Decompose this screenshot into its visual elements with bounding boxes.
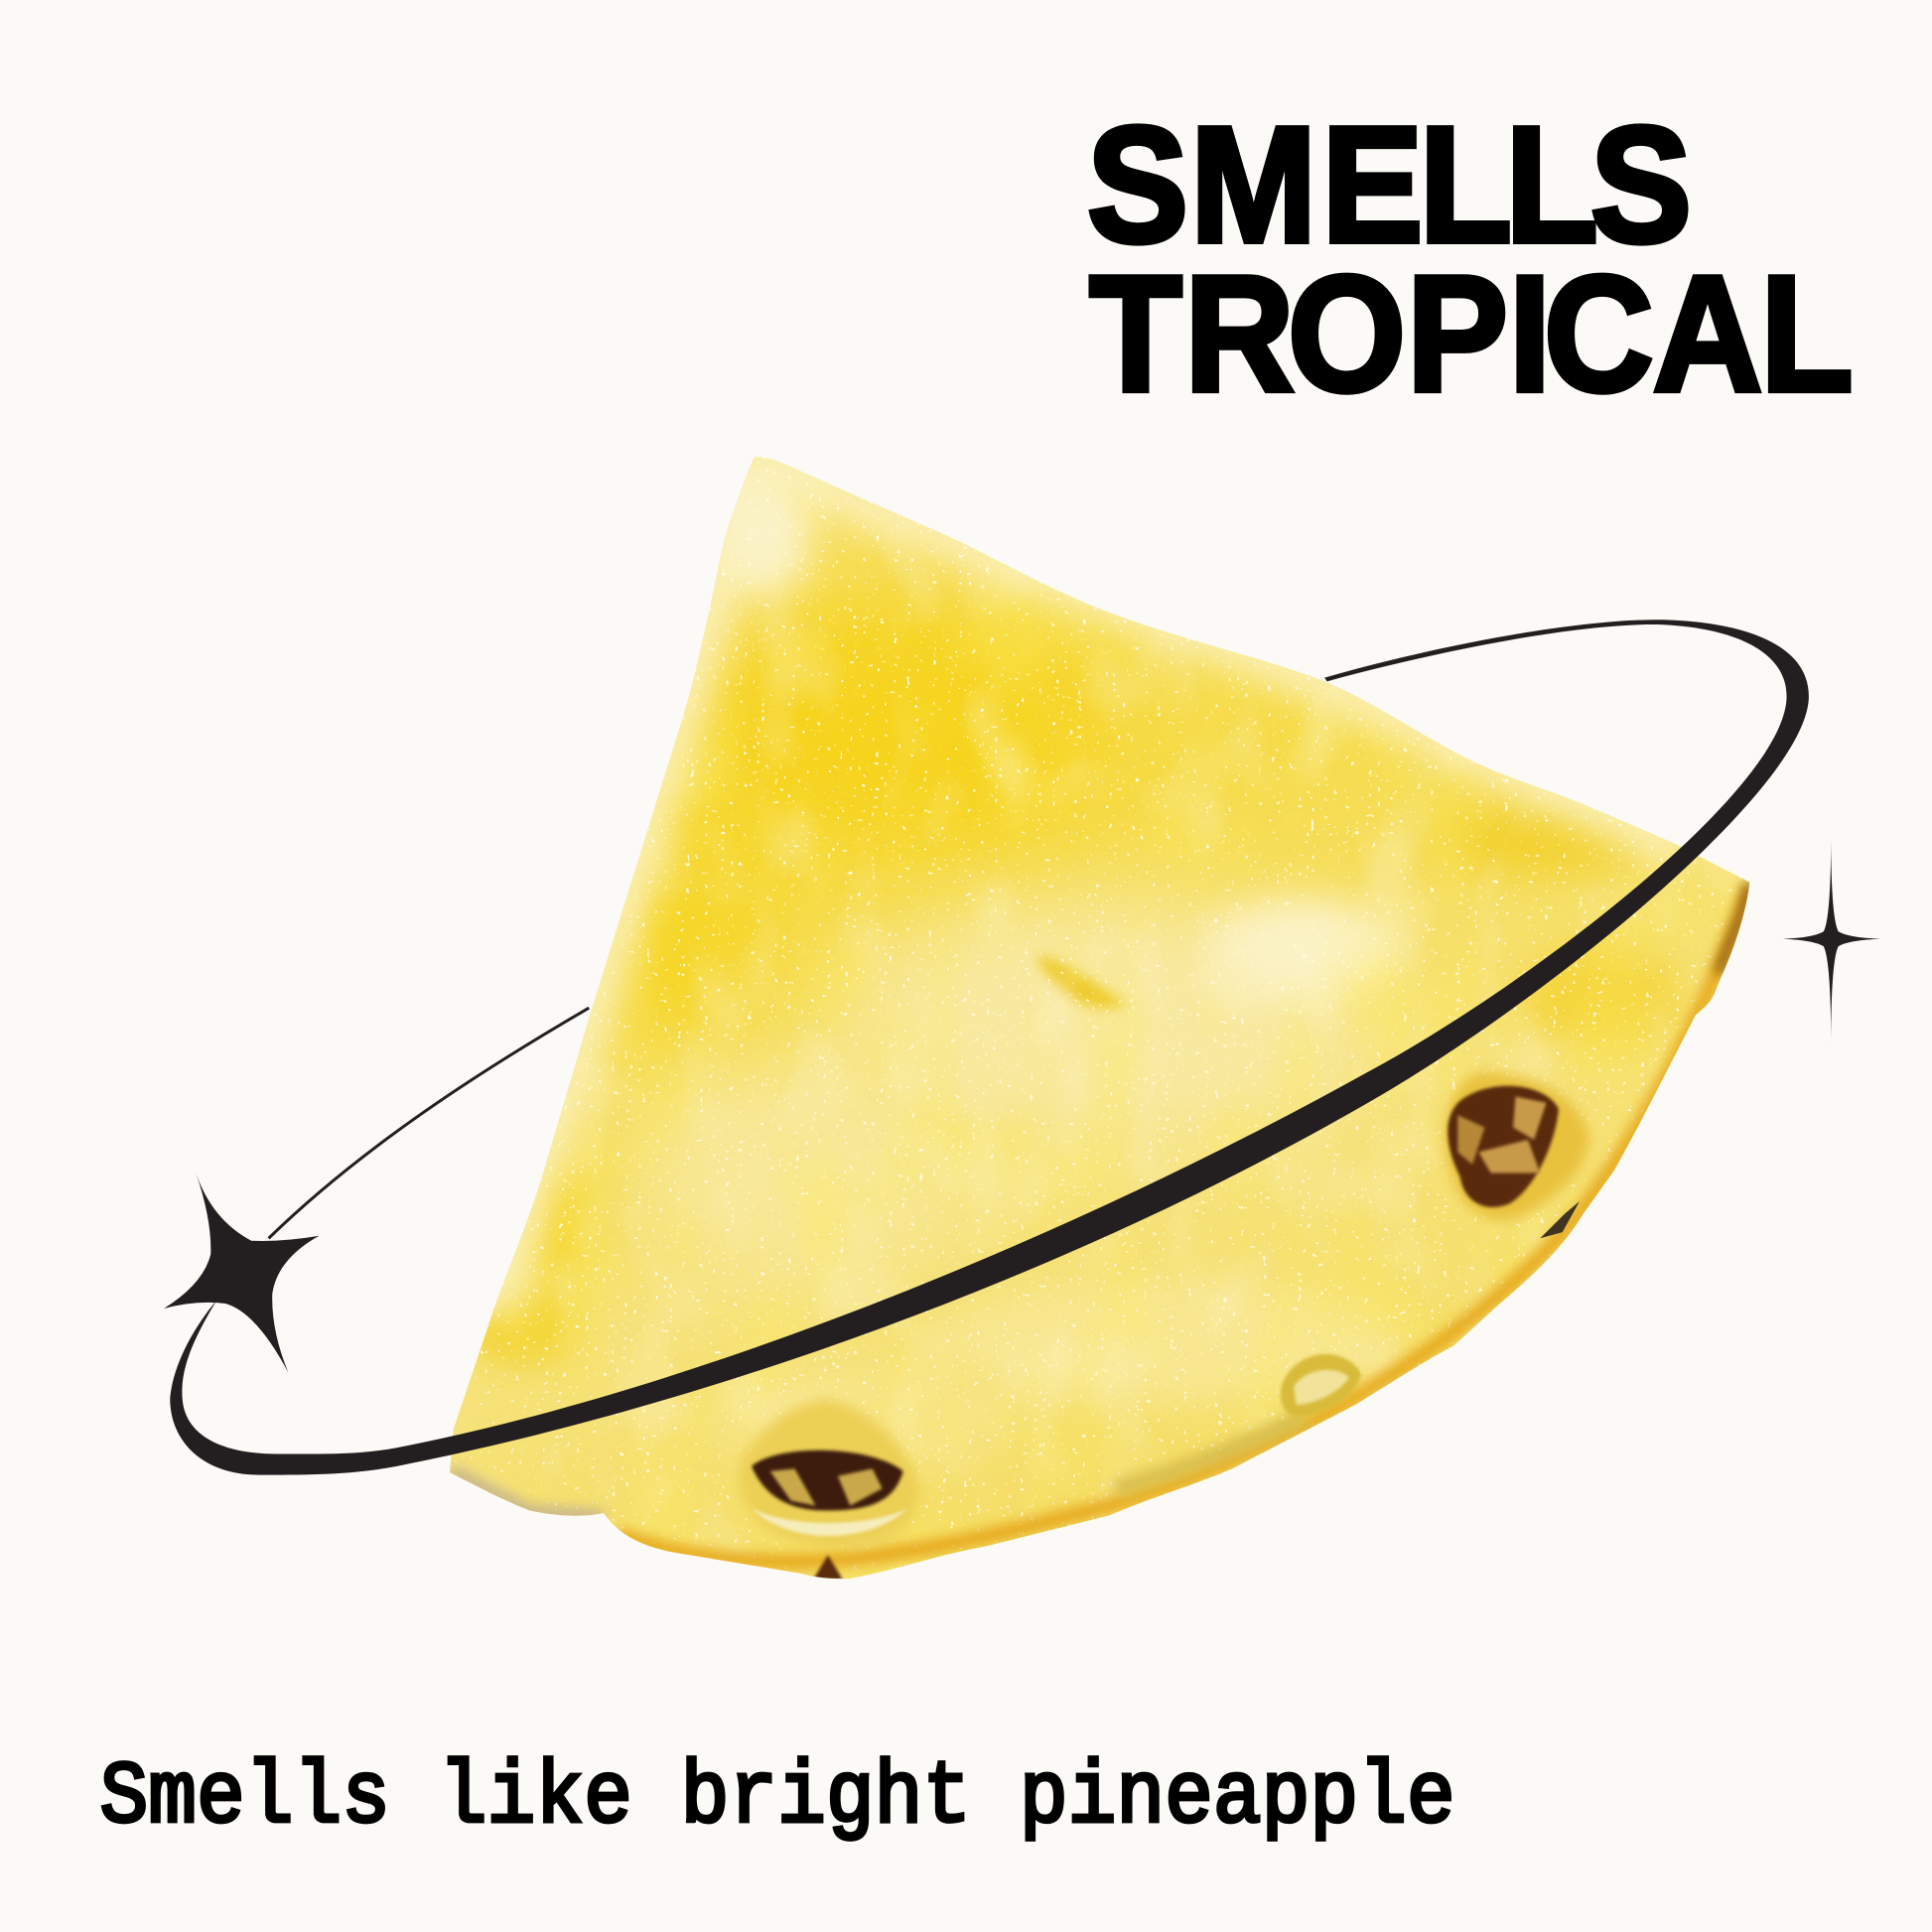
flesh colour zones xyxy=(469,604,1682,1472)
pale flesh along the cut edges xyxy=(492,457,1688,1312)
title: SMELLS xyxy=(1087,91,1692,277)
orbit ring front arc xyxy=(170,620,1809,1475)
pineapple slice xyxy=(419,431,1774,1601)
caption: Smells like bright pineapple xyxy=(100,1747,1455,1848)
title xyxy=(1087,91,1854,426)
icon: large four-point star xyxy=(164,1173,319,1373)
pineapple eye: right pit xyxy=(1445,1072,1589,1238)
title: TROPICAL xyxy=(1089,241,1854,426)
pineapple eye: minor rind dimple xyxy=(1281,1354,1361,1417)
thin back arc of the orbit ring xyxy=(269,1008,589,1238)
pineapple eye: bottom pit xyxy=(739,1399,919,1548)
rind edge shading xyxy=(617,888,1749,1562)
icon: small four-point star xyxy=(1783,834,1880,1044)
